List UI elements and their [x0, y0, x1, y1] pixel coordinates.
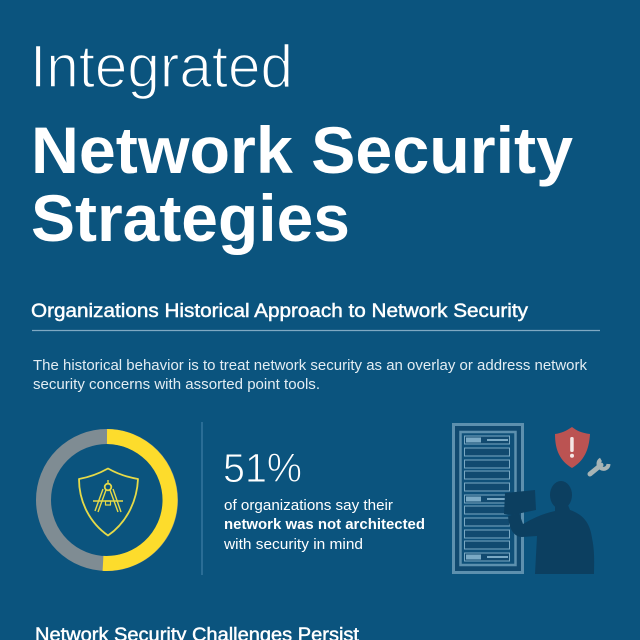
illustration: technician silhouette holding tablet [504, 481, 594, 574]
icon: wrench [590, 460, 608, 474]
intro paragraph: The historical behavior is to treat network security as an overlay or address network [33, 358, 588, 374]
section heading: historical approach: Organizations Historical Approach to Network Security [31, 301, 529, 322]
icon: shield with drafting compass [79, 468, 138, 536]
illustration: server rack [454, 424, 522, 572]
icon: red warning shield [555, 427, 590, 468]
stat description: with security in mind [223, 537, 363, 553]
stat: 51%: 51% [223, 445, 302, 491]
title: Network Security Strategies: Network Security [31, 113, 573, 187]
stat description: of organizations say their [224, 498, 393, 514]
stat description [223, 498, 425, 553]
intro paragraph: security concerns with assorted point tools. [33, 377, 320, 393]
stat description: network was not architected [224, 517, 425, 533]
title: Integrated: Integrated [30, 33, 293, 100]
title: Network Security Strategies: Strategies [31, 181, 350, 255]
intro paragraph [33, 358, 588, 393]
title: Network Security Strategies [31, 113, 573, 255]
donut chart: 51% [44, 436, 170, 564]
